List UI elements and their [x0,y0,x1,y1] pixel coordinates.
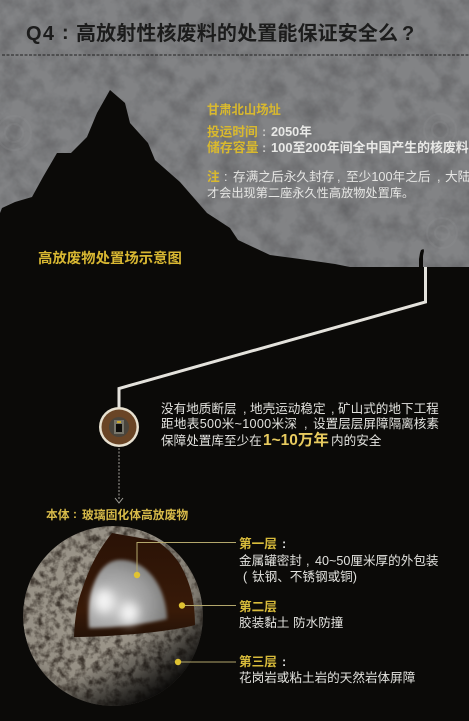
storage capacity: 100至200年间全中国产生的核废料 [271,140,469,155]
description line 1: , [243,402,246,416]
icon: repository cross-section [99,407,139,447]
layer 2: 第二层 [239,599,277,614]
layer 1: 钛钢、不锈钢或铜) [252,570,357,584]
title: 高放射性核废料的处置能保证安全么 [76,21,398,45]
title: ? [402,23,414,45]
description line 2: , [304,417,308,431]
description line 1: 没有地质断层 [161,402,237,416]
note line 1: 存满之后永久封存 [233,170,335,184]
shaft line [119,267,426,408]
note line 1: 注 [207,169,220,184]
layer 1 [239,536,439,584]
body heading: : [73,507,77,521]
metal canister core [89,560,167,628]
layer 1: ( [243,570,248,584]
site name: 甘肃北山场址 [207,102,281,117]
layer 3: 第三层 [239,654,277,669]
clay wedge [74,533,195,637]
description line 1: 地壳运动稳定 [250,401,326,416]
description line 3: 内的安全 [331,433,382,448]
note line 1: 至少100年之后 [346,170,431,184]
note line 2: 才会出现第二座永久性高放物处置库。 [207,185,414,200]
description line 1: 矿山式的地下工程 [338,401,439,416]
storage capacity: 储存容量 [207,140,259,155]
note line 1: , [337,170,341,184]
layer 1: 金属罐密封 [239,553,302,568]
geology description [161,401,439,449]
layer 1: : [282,537,286,551]
description line 1: , [331,402,334,416]
description line 2: 距地表500米~1000米深 [161,417,297,431]
layer 3: : [282,655,286,669]
title: : [62,22,69,44]
note line 1: , [437,170,441,184]
title: Q4 [26,23,55,45]
callout lines [137,542,236,662]
outer rock sphere [20,523,210,710]
layer 1: 40~50厘米厚的外包装 [315,553,439,568]
body heading [46,507,188,522]
background: concrete sky [0,0,469,300]
sphere diagram [20,523,236,710]
layer 3: 花岗岩或粘土岩的天然岩体屏障 [239,670,416,685]
note line 1: : [224,170,228,184]
operation date: 投运时间 [207,125,258,139]
layer descriptions [239,536,439,685]
callout dots [134,572,185,665]
layer 2: 胶装黏土 [239,615,289,630]
icon: person standing on surface [419,249,424,268]
layer 3 [239,654,416,685]
storage capacity: : [262,140,266,155]
body heading: 玻璃固化体高放废物 [82,508,188,522]
description line 2: 设置层层屏障隔离核素 [313,416,439,431]
arrow: dotted connector to body [115,448,123,503]
site information text [207,102,469,200]
layer 2: 防水防撞 [293,615,344,630]
layer 1: 第一层 [239,536,277,551]
body heading: 本体 [46,508,70,522]
description line 3: 1~10万年 [263,430,329,449]
diagram heading: 高放废物处置场示意图 [38,249,182,267]
description line 2 [161,416,439,431]
description line 3: 保障处置库至少在 [161,433,262,448]
operation date: : [262,125,266,139]
layer 1: , [306,554,310,568]
layer 2 [239,599,344,630]
operation date: 2050年 [271,124,312,139]
